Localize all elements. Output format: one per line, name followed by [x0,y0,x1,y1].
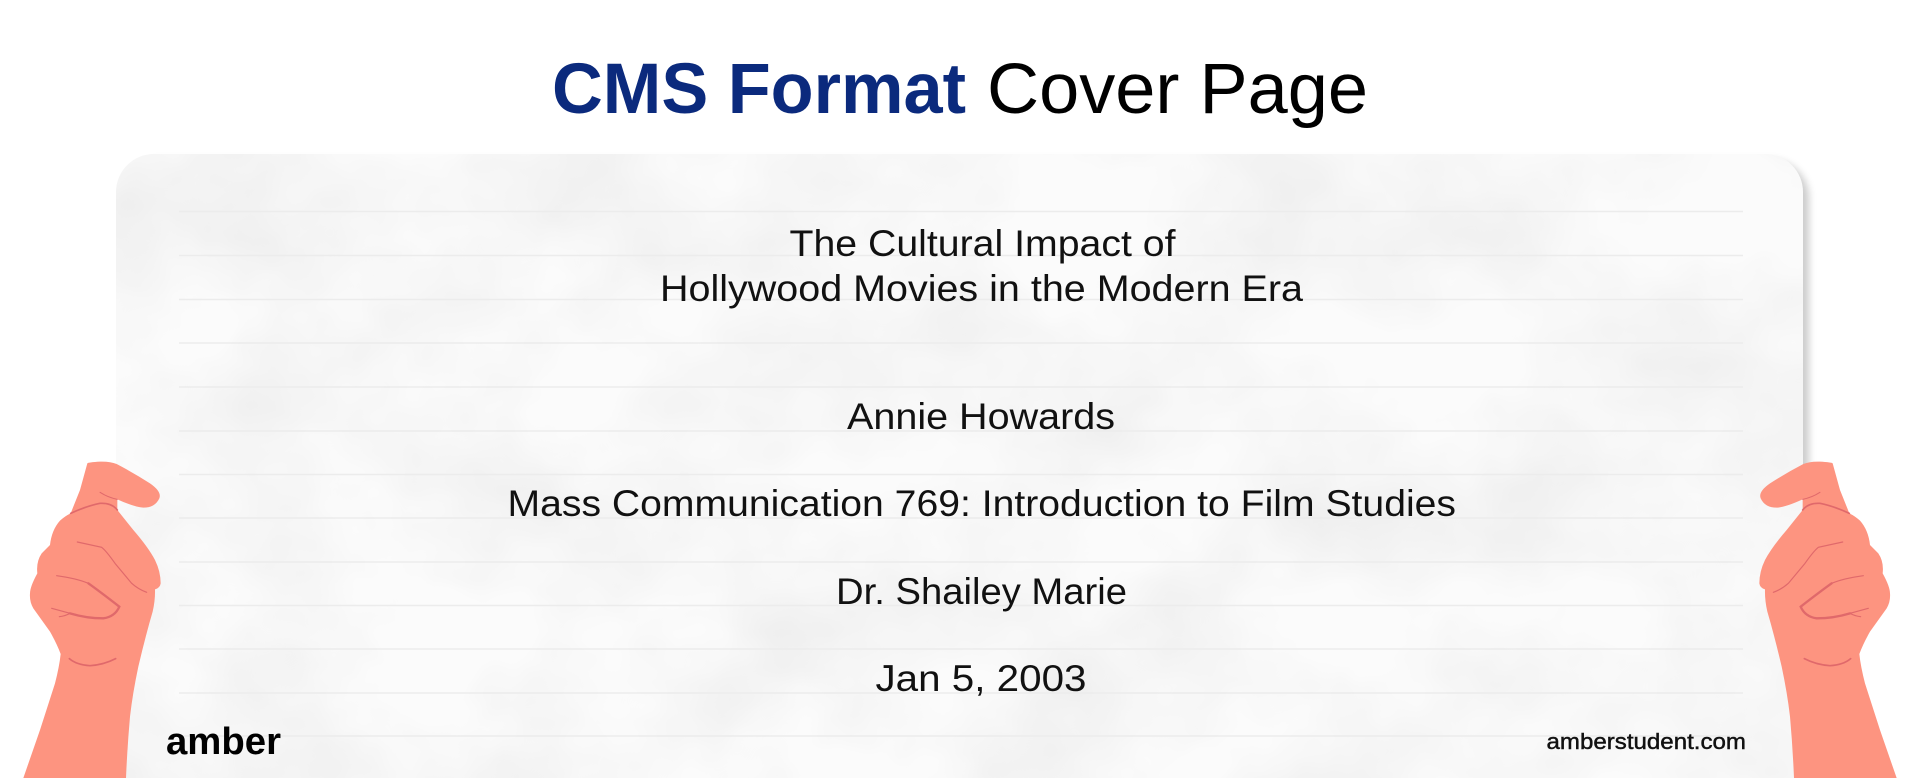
icon: right hand [1759,462,1897,778]
date: Jan 5, 2003 [876,658,1086,699]
instructor name: Dr. Shailey Marie [836,571,1127,612]
title: CMS Format [552,50,966,129]
paper title text: The Cultural Impact of [790,223,1176,264]
icon: left hand [23,462,161,778]
course name: Mass Communication 769: Introduction to Film Studies [508,483,1456,524]
title: Cover Page [987,50,1368,129]
logo: amber: amber [166,721,281,763]
website url: amberstudent.com [1546,729,1746,754]
panel: paper sheet [116,154,1809,778]
title [552,50,1368,129]
paper title text [660,223,1303,309]
author name: Annie Howards [847,396,1115,437]
paper title text: Hollywood Movies in the Modern Era [660,268,1303,309]
